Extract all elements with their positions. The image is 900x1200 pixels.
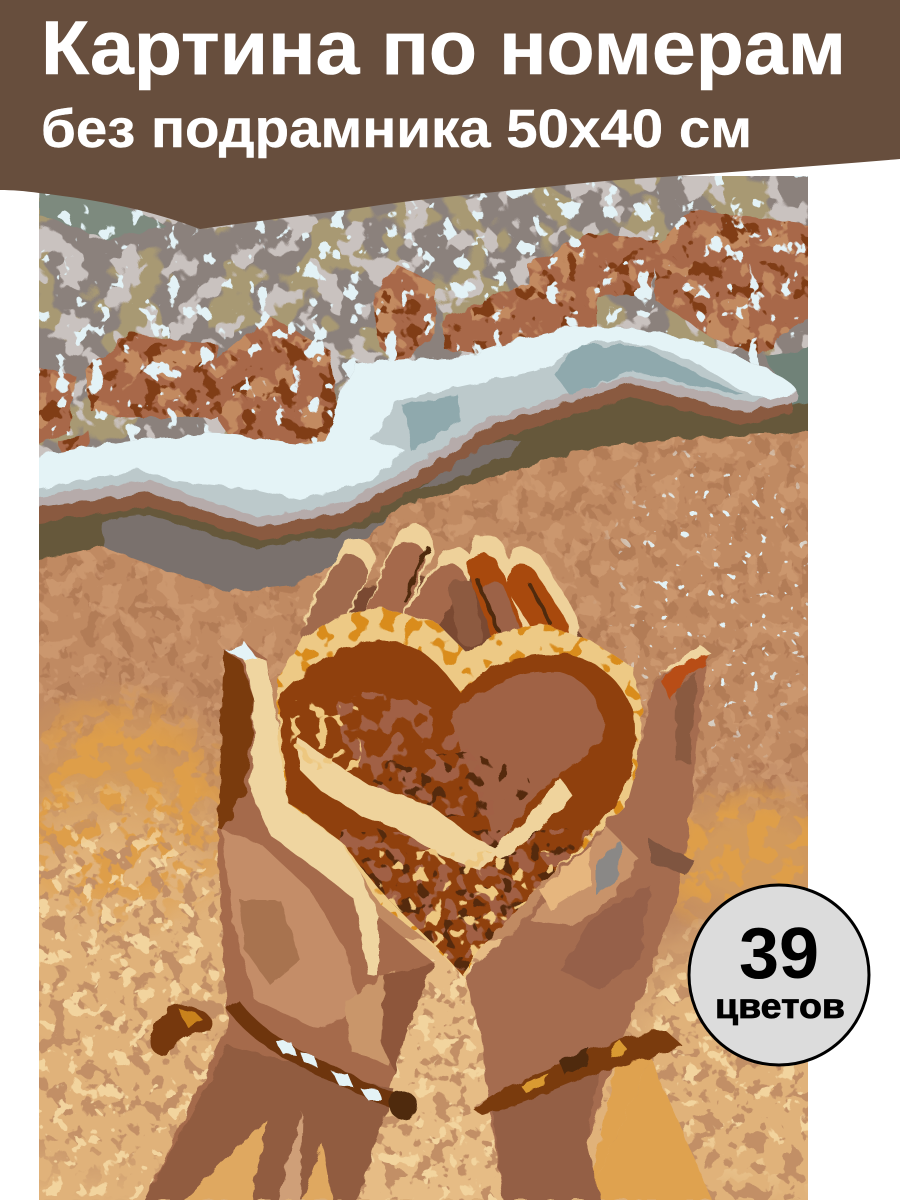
sand heart: [270, 600, 650, 980]
sea background with foam and stones: [39, 176, 808, 527]
right bracelet: [474, 1030, 682, 1115]
sand: [39, 430, 808, 1200]
base tone under the painting: [44, 1198, 799, 1200]
badge label: цветов: [715, 987, 845, 1026]
right hand: [464, 645, 712, 1200]
olive and grey wet sand: [15, 383, 835, 596]
subheading: без подрамника 50х40 см: [41, 99, 752, 159]
painting: hands holding a sand heart on the beach: [39, 176, 808, 1200]
colour count badge: [689, 885, 869, 1065]
heading: Картина по номерам: [41, 6, 846, 91]
left hand: [145, 642, 434, 1200]
upper fingers: [310, 545, 585, 675]
title banner: [0, 0, 900, 229]
number of colours: 39: [739, 914, 819, 994]
left bracelet: [150, 1004, 417, 1119]
brown stones: [39, 210, 808, 452]
foam wave: [15, 327, 798, 527]
